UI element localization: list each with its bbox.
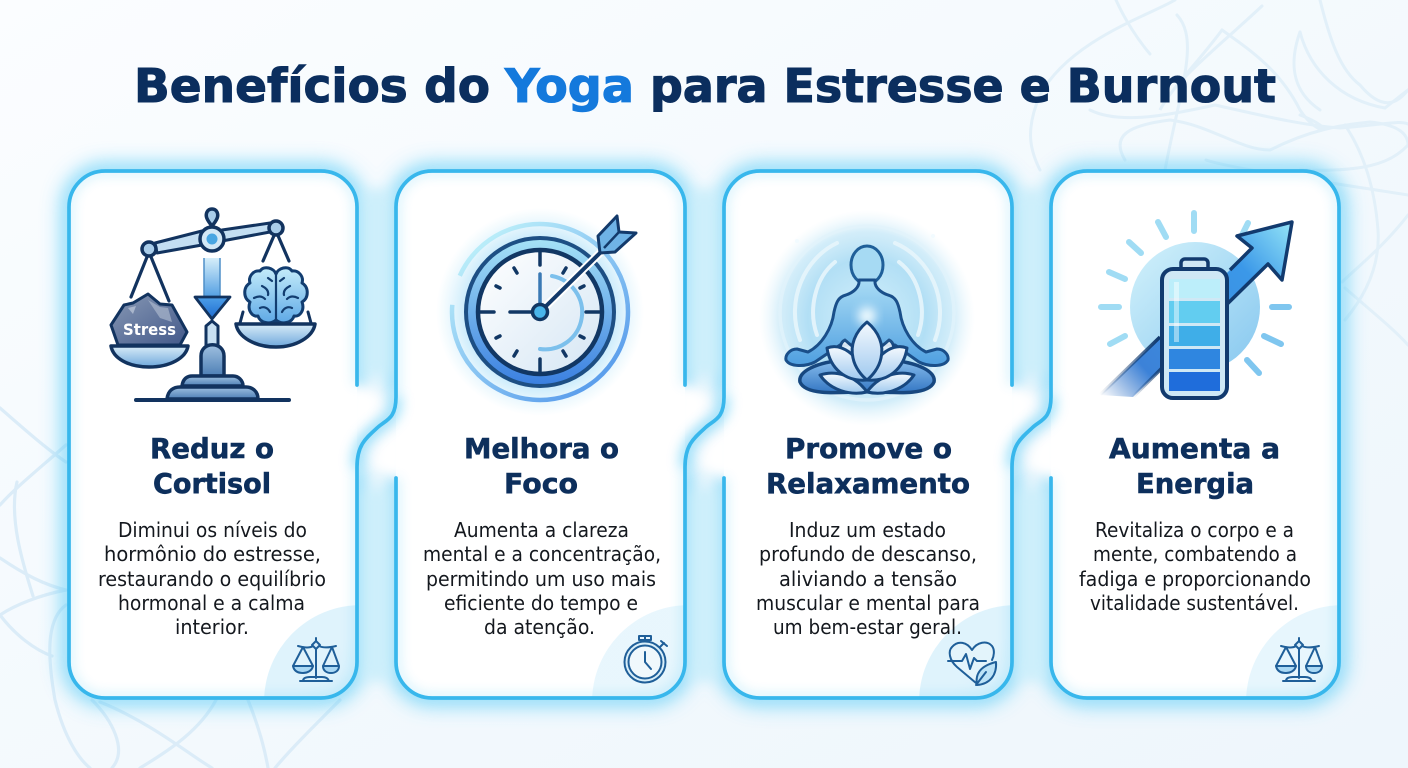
head and body (786, 246, 948, 366)
description: hormônio do estresse, (104, 542, 321, 566)
panel: Promove o Relaxamento (724, 171, 1012, 698)
brain (245, 268, 307, 323)
icon: heart with pulse and leaf (948, 643, 996, 685)
title (134, 59, 1276, 113)
panel: Reduz o Cortisol (69, 171, 357, 698)
description (1079, 518, 1311, 615)
description: da atenção. (484, 615, 595, 639)
title: Yoga (504, 59, 634, 113)
description: interior. (175, 615, 249, 639)
heading: Energia (1136, 467, 1254, 500)
description: eficiente do tempo e (444, 591, 638, 615)
description: hormonal e a calma (118, 591, 305, 615)
heading: Promove o (785, 432, 952, 465)
heading: Relaxamento (766, 467, 970, 500)
description (423, 518, 661, 639)
heading: Melhora o (464, 432, 619, 465)
icon: small scale (293, 638, 339, 681)
heading (150, 432, 274, 500)
icon: battery with sun rays and rising arrow (1100, 213, 1292, 398)
icon: meditating figure on lotus (759, 210, 975, 426)
description: vitalidade sustentável. (1090, 591, 1299, 615)
description: muscular e mental para (756, 591, 980, 615)
description (98, 518, 326, 639)
icon: clock with arrow target (416, 188, 664, 436)
heading (1109, 432, 1280, 500)
description (756, 518, 980, 639)
description: Induz um estado (789, 518, 946, 542)
description: fadiga e proporcionando (1079, 567, 1311, 591)
down arrow (195, 258, 230, 319)
icon: small scale (1276, 638, 1322, 681)
description: Diminui os níveis do (118, 518, 307, 542)
title: para Estresse e Burnout (650, 59, 1276, 113)
description: restaurando o equilíbrio (98, 567, 326, 591)
background lotus line pattern, bottom left (0, 408, 340, 768)
description: mental e a concentração, (423, 542, 661, 566)
icon: stopwatch (624, 636, 667, 682)
description: um bem-estar geral. (773, 615, 962, 639)
heading: Foco (504, 467, 578, 500)
heading: Reduz o (150, 432, 274, 465)
icon: balance scale with stress stone and brain (111, 209, 315, 400)
description: mente, combatendo a (1093, 542, 1297, 566)
background lotus line pattern, top right (1031, 0, 1408, 345)
stress stone: Stress (123, 320, 176, 339)
heading (766, 432, 970, 500)
panel: Aumenta a Energia (1051, 171, 1339, 698)
description: aliviando a tensão (779, 567, 957, 591)
description: permitindo um uso mais (426, 567, 656, 591)
panel: Melhora o Foco (396, 171, 685, 698)
description: Revitaliza o corpo e a (1095, 518, 1294, 542)
card frames with connecting curves (69, 171, 1408, 768)
heading (464, 432, 619, 500)
heading: Aumenta a (1109, 432, 1280, 465)
stress stone (111, 294, 187, 345)
description: Aumenta a clareza (454, 518, 629, 542)
description: profundo de descanso, (759, 542, 977, 566)
lotus (820, 322, 914, 393)
title: Benefícios do (134, 59, 490, 113)
heading: Cortisol (153, 467, 271, 500)
